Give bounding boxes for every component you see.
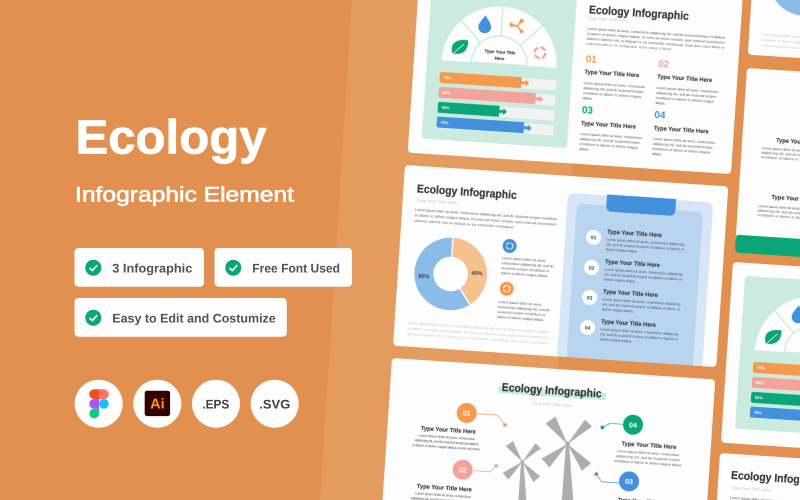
callout 03: 03 bbox=[625, 477, 633, 486]
intro paragraph: ut labore et dolore magna aliqua. Ut enim ad minim veniam, quis nostrud exercitation bbox=[415, 213, 557, 227]
feature pill: Easy to Edit and Costumize: Easy to Edit and Costumize bbox=[112, 311, 276, 325]
intro paragraph: Lorem ipsum dolor sit amet, consectetur adipiscing elit, sed do eiusmod tempor incididunt bbox=[415, 208, 557, 221]
donut chart: 40% bbox=[471, 271, 483, 277]
list item 02: Lorem ipsum dolor sit amet, consectetur adipiscing bbox=[604, 267, 683, 277]
donut fragment bbox=[766, 0, 800, 18]
progress bars: 50% bbox=[442, 106, 450, 110]
diagram label bbox=[484, 48, 516, 62]
icon: water drop bbox=[478, 15, 492, 34]
feature pill: Free Font Used: Free Font Used bbox=[252, 261, 340, 275]
subheading: Type Your Title Here bbox=[731, 486, 771, 492]
item 02: 02 bbox=[658, 59, 670, 71]
item 01: adipiscing elit, sed do eiusmod tempor bbox=[583, 86, 644, 94]
legend text: orange: consectetur adipiscing elit, sed do bbox=[498, 305, 550, 312]
icon: water drop bbox=[791, 305, 800, 324]
item 03: Type Your Title Here bbox=[581, 120, 637, 131]
progress bars: 70% bbox=[757, 366, 765, 370]
windmill: small bbox=[503, 441, 541, 500]
item 04: 04 bbox=[654, 110, 666, 122]
footnote paragraph bbox=[407, 321, 550, 345]
list item 02: 02 bbox=[589, 265, 595, 272]
callout 04: adipiscing elit, sed do eiusmod tempor bbox=[616, 454, 681, 462]
legend text: blue bbox=[501, 256, 554, 279]
progress bars: 75% bbox=[754, 411, 762, 415]
item 02 bbox=[655, 59, 721, 109]
item 03: aliqua. bbox=[579, 147, 589, 152]
windmill: large bbox=[542, 417, 592, 500]
text block lower bbox=[757, 193, 800, 222]
item 01: incididunt ut labore et dolore magna bbox=[583, 91, 641, 99]
list item 01 bbox=[585, 227, 685, 257]
item 01: 01 bbox=[585, 54, 598, 66]
diagram label: Here bbox=[495, 56, 505, 61]
heading with highlight: Ecology Infographic bbox=[501, 382, 602, 400]
title: Ecology bbox=[76, 112, 267, 164]
mint panel bbox=[735, 276, 800, 438]
feature pill: Free Font Used bbox=[214, 248, 352, 287]
mint panel bbox=[422, 0, 577, 148]
list item 02 bbox=[583, 257, 683, 287]
semicircle diagram bbox=[755, 292, 800, 358]
legend text: orange bbox=[497, 300, 550, 322]
list item 02: elit, sed do eiusmod tempor incididunt ut labore et bbox=[604, 272, 682, 282]
callout 04: incididunt ut labore et dolore magna aliqua bbox=[614, 459, 681, 467]
heading: Ecology Infographic bbox=[417, 183, 518, 202]
icon: EPS bbox=[192, 380, 240, 428]
icon: EPS: .EPS bbox=[202, 397, 229, 411]
panel: slide 7 right copy bbox=[708, 453, 800, 500]
progress bars bbox=[750, 362, 800, 426]
callout 02: 02 bbox=[458, 465, 467, 475]
icon: Adobe Illustrator: Ai bbox=[150, 397, 165, 413]
legend text: blue: consectetur adipiscing elit, sed do bbox=[502, 261, 554, 269]
green band bbox=[735, 235, 800, 274]
list item 01: Type Your Title Here bbox=[607, 229, 663, 239]
panel: slide 2 donut and list bbox=[393, 165, 728, 367]
list item 03: elit, sed do eiusmod tempor incididunt ut labore et bbox=[602, 302, 680, 312]
subtitle: Infographic Element bbox=[75, 184, 294, 206]
semicircle diagram bbox=[442, 2, 560, 68]
list item 04: dolore magna aliqua. bbox=[600, 337, 632, 343]
callout 02 bbox=[408, 456, 498, 500]
progress bars: 50% bbox=[755, 396, 763, 400]
clipboard panel bbox=[557, 192, 713, 366]
callout 04: Type Your Title Here bbox=[621, 440, 677, 451]
list item 03: dolore magna aliqua. bbox=[602, 307, 634, 313]
intro paragraph: ullamco laboris nisi ut aliquip ex ea commodo consequat. Duis aute irure dolor in bbox=[586, 37, 725, 50]
intro paragraph bbox=[586, 27, 725, 55]
feature pill: Easy to Edit and Costumize bbox=[74, 298, 287, 337]
icon: turbine bbox=[509, 18, 525, 35]
item 02: Lorem ipsum dolor sit amet, consectetur bbox=[656, 86, 719, 94]
legend text: orange: labore et dolore magna aliqua. bbox=[497, 315, 544, 322]
icon: Figma bbox=[75, 380, 123, 428]
intro paragraph: reprehenderit in voluptate velit esse cillum. bbox=[586, 42, 672, 51]
panel: slide 5 right bbox=[735, 68, 800, 274]
icon: leaf bbox=[765, 329, 782, 345]
footnote paragraph: Lorem ipsum dolor sit amet, consectetur adipiscing elit, sed do eiusmod tempor incididunt bbox=[408, 321, 550, 334]
item 04: Lorem ipsum dolor sit amet, consectetur bbox=[653, 137, 716, 145]
subheading: Type Your Title Here bbox=[532, 401, 572, 408]
item 01: Type Your Title Here bbox=[584, 69, 640, 79]
list item 04: 04 bbox=[585, 325, 591, 332]
icon: leaf bbox=[451, 39, 468, 55]
callout 01: Type Your Title Here bbox=[421, 425, 477, 436]
feature pill: 3 Infographic: 3 Infographic bbox=[112, 261, 192, 275]
panel: slide 6 right copy bbox=[721, 262, 800, 464]
list item 04 bbox=[579, 317, 679, 346]
subheading: Type Your Title Here bbox=[588, 16, 628, 23]
icon: orange recycle bbox=[499, 281, 514, 296]
legend text: blue: eiusmod tempor incididunt ut bbox=[501, 266, 549, 273]
icon: blue globe bbox=[502, 239, 517, 253]
panel: slide 1 bars and columns bbox=[408, 0, 743, 174]
item 02: incididunt ut labore et dolore magna bbox=[656, 96, 714, 104]
icon: SVG: .SVG bbox=[259, 397, 290, 411]
list item 02: Type Your Title Here bbox=[605, 258, 661, 269]
list item 01: dolore magna aliqua. bbox=[606, 248, 638, 254]
heading: Ecology Infographic bbox=[589, 4, 690, 23]
list item 03: Lorem ipsum dolor sit amet, consectetur adipiscing bbox=[602, 297, 681, 307]
item 04 bbox=[652, 110, 718, 160]
list item 01: 01 bbox=[591, 235, 597, 242]
list item 03: 03 bbox=[587, 295, 593, 302]
progress bars: 75% bbox=[441, 121, 449, 125]
list item 01: elit, sed do eiusmod tempor incididunt ut labore et bbox=[606, 243, 684, 252]
callout 03 bbox=[592, 469, 680, 500]
callout 02: Type Your Title Here bbox=[417, 483, 473, 494]
item 03: incididunt ut labore et dolore magna bbox=[579, 142, 638, 150]
callout 04: 04 bbox=[629, 420, 637, 430]
feature pill: 3 Infographic bbox=[74, 248, 204, 287]
callout 01: 01 bbox=[462, 408, 471, 418]
item 01: Lorem ipsum dolor sit amet, consectetur bbox=[584, 81, 647, 89]
footnote paragraph: ullamco laboris nisi ut aliquip ex ea commodo consequat. Duis aute irure dolor. bbox=[407, 332, 549, 345]
item 04: adipiscing elit, sed do eiusmod tempor bbox=[653, 142, 714, 150]
item 01: aliqua. bbox=[583, 96, 593, 101]
icon: recycle bbox=[534, 47, 546, 58]
progress bars: 70% bbox=[444, 76, 452, 80]
icon: Adobe Illustrator bbox=[133, 380, 181, 428]
icon: SVG bbox=[251, 380, 299, 428]
donut chart: 60% bbox=[418, 274, 430, 280]
list item 04: elit, sed do eiusmod tempor incididunt ut labore et bbox=[600, 332, 678, 341]
donut chart bbox=[411, 235, 490, 313]
subheading: Type Your Title Here bbox=[417, 198, 457, 205]
legend text: orange: Lorem ipsum dolor sit amet, bbox=[498, 300, 542, 307]
item 01 bbox=[583, 54, 648, 104]
progress bars bbox=[436, 72, 557, 136]
item 02: aliqua. bbox=[655, 101, 666, 106]
list item 01: Lorem ipsum dolor sit amet, consectetur adipiscing bbox=[606, 238, 685, 247]
item 04: aliqua. bbox=[652, 152, 662, 156]
footnote paragraph bbox=[761, 33, 800, 57]
panel: slide 4 top right bbox=[748, 0, 800, 76]
intro paragraph: ullamco laboris nisi ut aliquip ex ea commodo consequat. bbox=[414, 219, 514, 229]
callout 01 bbox=[412, 400, 508, 453]
list item 02: dolore magna aliqua. bbox=[604, 277, 636, 284]
intro paragraph: Lorem ipsum dolor sit amet, consectetur adipiscing elit, sed do eiusmod tempor incididunt bbox=[587, 27, 725, 40]
text block upper bbox=[761, 136, 800, 164]
item 03: Lorem ipsum dolor sit amet, consectetur bbox=[580, 132, 643, 140]
item 03: 03 bbox=[581, 105, 594, 117]
callout 04 bbox=[598, 413, 684, 467]
item 02: Type Your Title Here bbox=[657, 73, 713, 84]
legend text: orange: eiusmod tempor incididunt ut bbox=[497, 310, 546, 317]
list item 03: Type Your Title Here bbox=[603, 288, 659, 299]
item 03 bbox=[579, 105, 645, 155]
item 04: incididunt ut labore et dolore magna bbox=[652, 147, 711, 155]
progress bars: 80% bbox=[443, 91, 451, 95]
list item 03 bbox=[581, 287, 681, 317]
panel: slide 3 windmills bbox=[380, 358, 715, 500]
callout 02: Lorem ipsum dolor sit amet, consectetur bbox=[415, 491, 472, 499]
legend text: blue: Lorem ipsum dolor sit amet, bbox=[502, 256, 546, 263]
progress bars: 80% bbox=[756, 381, 764, 385]
legend text: blue: labore et dolore magna aliqua. bbox=[501, 271, 548, 278]
footnote paragraph: ut labore et dolore magna aliqua. Ut enim ad minim veniam, quis nostrud exercitation bbox=[407, 327, 549, 340]
item 03: adipiscing elit, sed do eiusmod tempor bbox=[580, 137, 641, 145]
intro paragraph bbox=[414, 208, 557, 232]
intro paragraph: ut labore et dolore magna aliqua. Ut enim ad minim veniam, quis nostrud exercitation bbox=[587, 32, 725, 45]
callout 01: ut labore et dolore magna aliqua ut enim ad minim bbox=[412, 443, 480, 452]
list item 04: Lorem ipsum dolor sit amet, consectetur adipiscing bbox=[600, 327, 679, 336]
callout 04: Lorem ipsum dolor sit amet, consectetur bbox=[617, 449, 680, 457]
list item 04: Type Your Title Here bbox=[601, 318, 657, 329]
callout 01: Lorem ipsum dolor sit amet, consectetur bbox=[419, 433, 476, 441]
callout 01: adipiscing elit, sed do eiusmod tempor incididunt bbox=[414, 438, 479, 446]
diagram label: Type Your Title bbox=[484, 48, 516, 56]
item 04: Type Your Title Here bbox=[654, 125, 710, 136]
item 02: adipiscing elit, sed do eiusmod tempor bbox=[656, 91, 717, 99]
